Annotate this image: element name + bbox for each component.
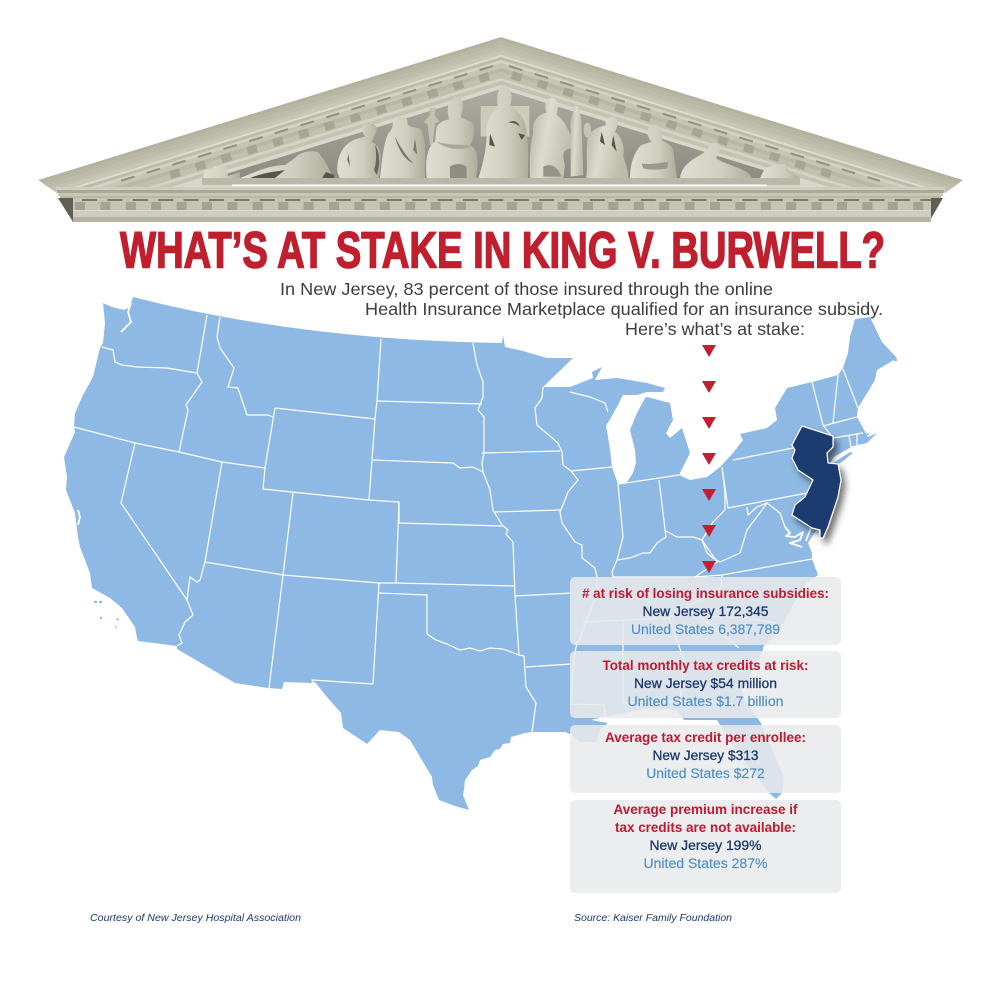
raking dentils right <box>509 66 880 181</box>
intro text: In New Jersey, 83 percent of those insured through the online <box>280 279 773 299</box>
panel: premium increase: Average premium increase if <box>614 802 798 817</box>
raking dentils left <box>120 66 493 181</box>
panel: monthly tax credits: Total monthly tax credits at risk: <box>602 658 808 673</box>
panel: average tax credit: New Jersey $313 <box>652 748 758 763</box>
pediment with sculptures <box>38 37 963 222</box>
panel: subsidies at risk: New Jersey 172,345 <box>642 604 768 619</box>
panel: premium increase: United States 287% <box>644 856 768 871</box>
panel: subsidies at risk: # at risk of losing insurance subsidies: <box>582 586 829 601</box>
panel: premium increase: New Jersey 199% <box>650 838 762 853</box>
intro text: Here’s what’s at stake: <box>625 319 805 339</box>
contiguous states landmass <box>64 297 897 810</box>
intro text <box>280 279 883 339</box>
ledge under the sculptures <box>202 178 800 185</box>
state borders <box>74 315 863 732</box>
panel: average tax credit: Average tax credit per enrollee: <box>605 730 806 745</box>
horizontal cornice <box>56 187 945 222</box>
map of the United States <box>64 297 897 810</box>
bays and inlets <box>78 303 812 547</box>
panel: premium increase <box>570 800 841 893</box>
panel: monthly tax credits: New Jersey $54 million <box>634 676 777 691</box>
panel: subsidies at risk <box>570 577 841 645</box>
panel: subsidies at risk: United States 6,387,789 <box>631 622 780 637</box>
New Jersey highlighted <box>792 426 841 538</box>
panel: average tax credit: United States $272 <box>646 766 765 781</box>
panel: monthly tax credits: United States $1.7 billion <box>628 694 784 709</box>
intro text: Health Insurance Marketplace qualified for an insurance subsidy. <box>365 299 883 319</box>
panel: average tax credit <box>570 725 841 793</box>
arrows pointing down to New Jersey data <box>702 345 716 573</box>
source: Source: Kaiser Family Foundation <box>574 912 732 924</box>
panel: premium increase: tax credits are not available: <box>615 820 796 835</box>
panel: monthly tax credits <box>570 651 841 718</box>
Long Island and coastal islands <box>94 359 897 629</box>
sculpted figures <box>203 85 800 178</box>
credit: Courtesy of New Jersey Hospital Association <box>90 912 301 924</box>
